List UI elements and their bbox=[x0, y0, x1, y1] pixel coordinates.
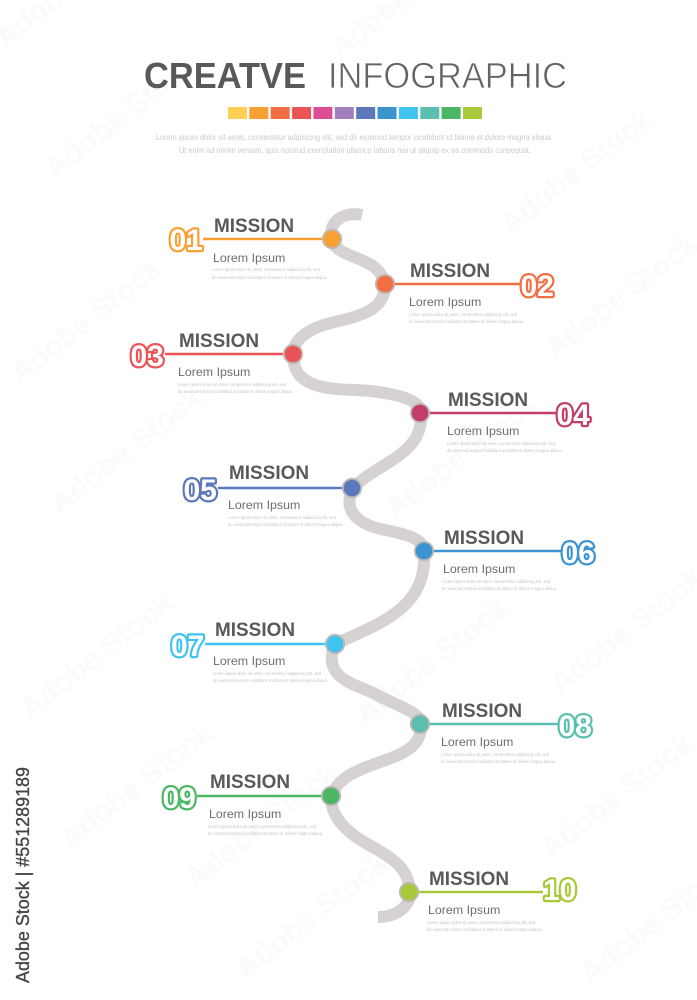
step 01: do eiusmod tempor incididunt ut labore et dolore magna aliqua. bbox=[212, 275, 327, 280]
step 09: Lorem Ipsum bbox=[209, 807, 281, 821]
step 08: 08 bbox=[558, 710, 592, 743]
step 08: do eiusmod tempor incididunt ut labore et dolore magna aliqua. bbox=[441, 759, 556, 764]
step 05: do eiusmod tempor incididunt ut labore et dolore magna aliqua. bbox=[228, 522, 343, 527]
step 03: Lorem ipsum dolor sit amet, consectetur adipiscing elit, sed bbox=[178, 382, 286, 387]
step 04: do eiusmod tempor incididunt ut labore et dolore magna aliqua. bbox=[447, 448, 562, 453]
step 03: MISSION bbox=[179, 331, 259, 352]
title bbox=[144, 55, 567, 96]
watermark pattern: Adobe Stock bbox=[379, 386, 544, 526]
step 03 bbox=[130, 331, 302, 394]
step 03: Lorem Ipsum bbox=[178, 365, 250, 379]
watermark pattern: Adobe Stock bbox=[39, 46, 204, 186]
step 07: Lorem Ipsum bbox=[213, 654, 285, 668]
step 02: do eiusmod tempor incididunt ut labore et dolore magna aliqua. bbox=[409, 319, 524, 324]
step 03: 03 bbox=[130, 340, 164, 373]
step 01: Lorem Ipsum bbox=[213, 251, 285, 265]
colour swatch strip bbox=[228, 107, 482, 119]
stock credit: Adobe Stock | #551289189 bbox=[13, 767, 33, 983]
step 04 bbox=[411, 390, 590, 453]
step 09 bbox=[162, 772, 340, 836]
step 02: Lorem Ipsum bbox=[409, 295, 481, 309]
step 08: MISSION bbox=[442, 701, 522, 722]
step 04: Lorem Ipsum bbox=[447, 424, 519, 438]
step 02: MISSION bbox=[410, 261, 490, 282]
step 08: Lorem ipsum dolor sit amet, consectetur adipiscing elit, sed bbox=[441, 752, 549, 757]
step 06: 06 bbox=[562, 537, 595, 570]
step 01: MISSION bbox=[214, 216, 294, 237]
step 07 bbox=[171, 620, 344, 683]
step 07: 07 bbox=[171, 630, 204, 663]
step 03: do eiusmod tempor incididunt ut labore et dolore magna aliqua. bbox=[178, 389, 293, 394]
step 05: Lorem ipsum dolor sit amet, consectetur adipiscing elit, sed bbox=[228, 515, 336, 520]
step 04: Lorem ipsum dolor sit amet, consectetur adipiscing elit, sed bbox=[447, 441, 555, 446]
step 05: MISSION bbox=[229, 463, 309, 484]
watermark pattern: Adobe Stock bbox=[54, 716, 219, 856]
step 01: 01 bbox=[170, 224, 203, 257]
step 09: do eiusmod tempor incididunt ut labore et dolore magna aliqua. bbox=[208, 831, 323, 836]
step 06: do eiusmod tempor incididunt ut labore et dolore magna aliqua. bbox=[442, 586, 557, 591]
step 02: Lorem ipsum dolor sit amet, consectetur adipiscing elit, sed bbox=[409, 312, 517, 317]
step 10: MISSION bbox=[429, 869, 509, 890]
title: CREATVE bbox=[144, 55, 306, 96]
intro text: Ut enim ad minim veniam, quis nostrud exercitation ullamco laboris nisi ut aliquip ex ea commodo consequat. bbox=[179, 145, 531, 155]
step 07: Lorem ipsum dolor sit amet, consectetur adipiscing elit, sed bbox=[213, 671, 321, 676]
step 02: 02 bbox=[520, 270, 554, 303]
step 04: MISSION bbox=[448, 390, 528, 411]
step 02 bbox=[376, 261, 554, 324]
step 01: Lorem ipsum dolor sit amet, consectetur adipiscing elit, sed bbox=[212, 267, 320, 272]
intro text: Lorem ipsum dolor sit amet, consectetur adipiscing elit, sed do eiusmod tempor incididunt ut labore et dolore magna aliqua. bbox=[156, 132, 553, 142]
step 01 bbox=[170, 216, 341, 280]
step 10: do eiusmod tempor incididunt ut labore et dolore magna aliqua. bbox=[427, 927, 542, 932]
watermark pattern: Adobe Stock bbox=[179, 756, 344, 896]
step 09: Lorem ipsum dolor sit amet, consectetur adipiscing elit, sed bbox=[208, 824, 316, 829]
watermark pattern: Adobe Stock bbox=[44, 381, 209, 521]
watermark pattern: Adobe Stock bbox=[14, 586, 179, 726]
step 05 bbox=[184, 463, 361, 527]
intro text bbox=[156, 132, 553, 155]
watermark pattern: Adobe Stock bbox=[534, 726, 697, 866]
step 06: Lorem ipsum dolor sit amet, consectetur adipiscing elit, sed bbox=[442, 579, 550, 584]
watermark pattern: Adobe Stock bbox=[349, 591, 514, 731]
step 06: Lorem Ipsum bbox=[443, 562, 515, 576]
step 10: 10 bbox=[543, 874, 576, 907]
watermark pattern: Adobe Stock bbox=[4, 251, 169, 391]
step 09: MISSION bbox=[210, 772, 290, 793]
step 06 bbox=[415, 528, 595, 591]
watermark pattern: Adobe Stock bbox=[229, 846, 394, 986]
step 07: do eiusmod tempor incididunt ut labore et dolore magna aliqua. bbox=[213, 678, 328, 683]
step 05: Lorem Ipsum bbox=[228, 498, 300, 512]
step 04: 04 bbox=[556, 399, 590, 432]
winding road bbox=[293, 214, 424, 917]
step 07: MISSION bbox=[215, 620, 295, 641]
title: INFOGRAPHIC bbox=[328, 55, 567, 96]
watermark pattern: Adobe Stock bbox=[494, 101, 659, 241]
step 09: 09 bbox=[162, 782, 196, 815]
step 05: 05 bbox=[184, 474, 217, 507]
step 08: Lorem Ipsum bbox=[441, 735, 513, 749]
step 10 bbox=[400, 869, 576, 932]
step 08 bbox=[411, 701, 592, 764]
step 10: Lorem Ipsum bbox=[428, 903, 500, 917]
step 10: Lorem ipsum dolor sit amet, consectetur adipiscing elit, sed bbox=[427, 920, 535, 925]
step 06: MISSION bbox=[444, 528, 524, 549]
